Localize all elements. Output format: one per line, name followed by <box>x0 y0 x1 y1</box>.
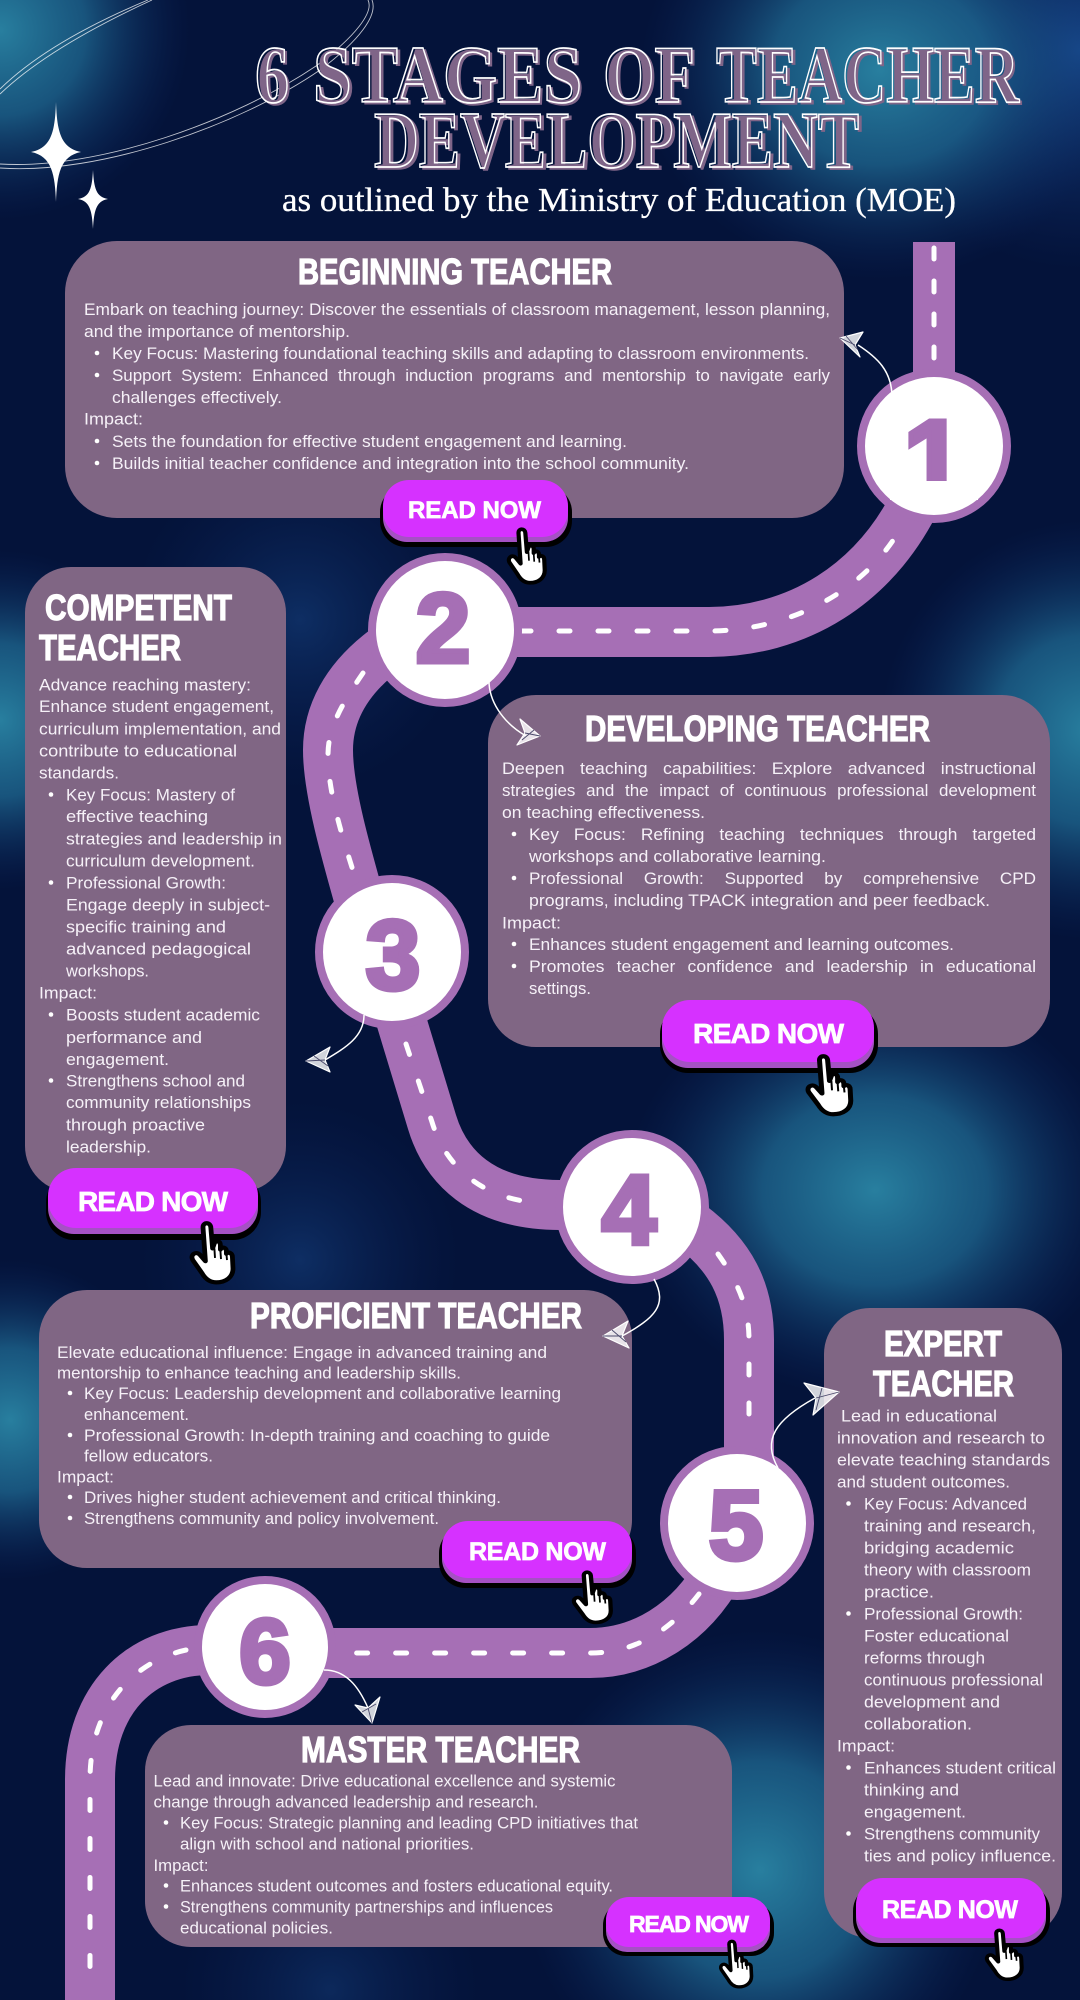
body text: ties and policy influence. <box>864 1846 1056 1866</box>
arrow: stage 2 to developing panel <box>489 678 540 745</box>
button: proficient read now: READ NOW <box>469 1538 606 1566</box>
button: competent read now <box>46 1168 261 1240</box>
icon: hand cursor expert <box>987 1930 1022 1979</box>
stage marker 4 <box>559 1134 705 1280</box>
button: competent read now: READ NOW <box>78 1186 229 1217</box>
body text: Boosts student academic <box>66 1006 260 1024</box>
body text: curriculum development. <box>66 852 255 870</box>
body text: leadership. <box>66 1138 151 1156</box>
stage marker 4: 4 <box>602 1155 656 1265</box>
body text: Impact: <box>84 410 143 428</box>
body text: reforms through <box>864 1648 985 1668</box>
title: DEVELOPMENT <box>374 97 859 185</box>
body text <box>84 300 830 473</box>
stage marker 2 <box>372 557 518 703</box>
body text: Strengthens community partnerships and influences <box>180 1898 553 1916</box>
icon: hand cursor beginning <box>509 529 545 583</box>
body text: and student outcomes. <box>837 1472 1010 1492</box>
body text: Support System: Enhanced through induction programs and mentorship to navigate early <box>112 366 830 385</box>
body text: Elevate educational influence: Engage in advanced training and <box>57 1343 547 1362</box>
body text: on teaching effectiveness. <box>502 803 705 822</box>
icon: hand cursor master <box>721 1941 752 1987</box>
body text: Advance reaching mastery: <box>39 676 251 694</box>
body text: Key Focus: Mastering foundational teaching skills and adapting to classroom environments. <box>112 344 809 363</box>
stage marker 5 <box>664 1450 810 1596</box>
panel: developing teacher <box>488 695 1050 1047</box>
body text: innovation and research to <box>837 1428 1045 1448</box>
body text: Enhances student critical <box>864 1758 1056 1778</box>
arrow: stage 5 to expert panel <box>771 1383 839 1468</box>
body text: enhancement. <box>84 1405 189 1424</box>
heading <box>873 1323 1014 1404</box>
panel: beginning teacher <box>65 241 844 518</box>
heading: BEGINNING TEACHER <box>298 251 612 292</box>
body text: Professional Growth: <box>864 1604 1023 1624</box>
button: beginning read now: READ NOW <box>408 497 541 524</box>
title: OF <box>603 29 695 120</box>
body text: strategies and leadership in <box>66 830 282 848</box>
body text: standards. <box>39 764 119 782</box>
heading: DEVELOPING TEACHER <box>585 708 930 749</box>
body text: Impact: <box>57 1468 114 1486</box>
body text: Strengthens community and policy involvement. <box>84 1509 439 1528</box>
body text: Impact: <box>154 1856 208 1875</box>
subtitle: as outlined by the Ministry of Education (MOE) <box>282 182 956 219</box>
icon: small sparkle <box>78 170 108 229</box>
body text: Professional Growth: Supported by comprehensive CPD <box>529 869 1036 888</box>
title: STAGES <box>313 29 582 120</box>
body text <box>502 759 1036 998</box>
stage marker 3 <box>319 879 465 1025</box>
stage marker 6 <box>198 1580 332 1714</box>
body text: Impact: <box>39 984 97 1002</box>
body text: bridging academic <box>864 1538 1015 1558</box>
panel: expert teacher <box>824 1308 1062 1938</box>
body text: workshops and collaborative learning. <box>528 847 826 866</box>
title: 6 <box>258 31 291 122</box>
panel: proficient teacher <box>39 1290 632 1568</box>
body text: Embark on teaching journey: Discover the essentials of classroom management, lesson planning, <box>84 300 830 319</box>
body text: Foster educational <box>864 1626 1009 1646</box>
title: STAGES <box>316 31 584 122</box>
button: master read now <box>603 1897 774 1956</box>
body text: Deepen teaching capabilities: Explore advanced instructional <box>502 759 1036 778</box>
button: developing read now: READ NOW <box>693 1018 845 1049</box>
body text: Lead in educational <box>841 1406 997 1426</box>
icon: hand cursor developing <box>808 1056 851 1114</box>
body text: elevate teaching standards <box>837 1450 1050 1470</box>
body text: Strengthens community <box>864 1824 1040 1844</box>
body text: Key Focus: Advanced <box>864 1494 1027 1514</box>
heading: MASTER TEACHER <box>301 1729 580 1770</box>
body text: collaboration. <box>864 1714 972 1734</box>
body text: fellow educators. <box>84 1446 213 1466</box>
body text: specific training and <box>66 918 226 936</box>
body text: Key Focus: Refining teaching techniques through targeted <box>529 825 1036 844</box>
arrow: stage 6 to master panel <box>324 1670 380 1723</box>
body text: mentorship to enhance teaching and leadership skills. <box>57 1364 461 1382</box>
body text: contribute to educational <box>39 742 237 760</box>
body text: Lead and innovate: Drive educational excellence and systemic <box>154 1772 616 1790</box>
body text: programs, including TPACK integration and peer feedback. <box>529 891 990 910</box>
body text: change through advanced leadership and research. <box>154 1792 538 1812</box>
body text: Professional Growth: <box>66 874 226 892</box>
body text: Builds initial teacher confidence and integration into the school community. <box>112 454 689 473</box>
icon: large sparkle <box>31 102 81 202</box>
body text: effective teaching <box>66 807 208 826</box>
title: DEVELOPMENT <box>377 99 862 187</box>
body text: engagement. <box>864 1802 966 1822</box>
body text: through proactive <box>66 1116 205 1134</box>
body text: engagement. <box>66 1050 169 1069</box>
body text: strategies and the impact of continuous professional development <box>502 781 1036 800</box>
button: developing read now <box>660 1000 878 1073</box>
body text: Impact: <box>502 914 561 932</box>
stage marker 2: 2 <box>416 573 470 683</box>
body text: settings. <box>529 979 591 998</box>
body text: align with school and national priorities. <box>180 1834 474 1854</box>
body text: development and <box>864 1692 1000 1712</box>
button: proficient read now <box>439 1521 636 1588</box>
stage marker 1: 1 <box>903 398 965 521</box>
body text: Promotes teacher confidence and leadership in educational <box>529 957 1036 976</box>
heading: PROFICIENT TEACHER <box>250 1295 582 1336</box>
body text: Strengthens school and <box>66 1072 245 1090</box>
button: master read now: READ NOW <box>629 1911 749 1937</box>
body text: and the importance of mentorship. <box>84 322 350 341</box>
stage marker 5: 5 <box>709 1470 763 1580</box>
road <box>90 242 934 2000</box>
body text: Enhances student outcomes and fosters educational equity. <box>180 1876 613 1896</box>
heading: COMPETENT <box>45 587 232 628</box>
body text: workshops. <box>65 962 149 980</box>
button: expert read now <box>853 1878 1050 1947</box>
icon: hand cursor competent <box>192 1223 233 1282</box>
title: 6 <box>255 29 289 120</box>
icon: hand cursor proficient <box>574 1572 611 1622</box>
body text: Sets the foundation for effective student engagement and learning. <box>112 432 627 451</box>
body text: challenges effectively. <box>112 388 282 407</box>
stage marker 6: 6 <box>239 1601 291 1703</box>
body text <box>57 1343 561 1528</box>
button: beginning read now <box>380 480 572 547</box>
body text: Engage deeply in subject- <box>66 896 270 914</box>
arrow: stage 3 to competent panel <box>306 1015 364 1072</box>
body text: performance and <box>66 1028 202 1047</box>
body text: thinking and <box>864 1780 959 1800</box>
body text: educational policies. <box>180 1918 333 1938</box>
decorative orbit lines <box>0 0 373 169</box>
stage marker 1 <box>861 373 1007 521</box>
body text <box>154 1772 638 1938</box>
body text: Professional Growth: In-depth training and coaching to guide <box>84 1426 550 1445</box>
title <box>255 29 1022 187</box>
arrow: stage 4 to proficient panel <box>603 1279 660 1348</box>
body text: curriculum implementation, and <box>39 720 281 738</box>
arrow: stage 1 to beginning panel <box>840 332 892 395</box>
heading: TEACHER <box>873 1363 1014 1404</box>
body text: Key Focus: Leadership development and collaborative learning <box>84 1384 561 1403</box>
heading: TEACHER <box>39 627 181 668</box>
body text <box>837 1406 1056 1866</box>
body text: practice. <box>864 1582 934 1602</box>
body text: Key Focus: Strategic planning and leading CPD initiatives that <box>180 1814 638 1832</box>
body text: community relationships <box>66 1093 251 1112</box>
body text: continuous professional <box>864 1670 1043 1690</box>
body text: Drives higher student achievement and critical thinking. <box>84 1488 501 1507</box>
body text: advanced pedagogical <box>66 940 251 958</box>
panel: master teacher <box>145 1725 732 1947</box>
title: OF <box>606 31 697 122</box>
stage marker 3: 3 <box>366 900 420 1010</box>
body text <box>39 676 282 1156</box>
body text: theory with classroom <box>864 1560 1031 1580</box>
body text: Enhance student engagement, <box>39 697 274 716</box>
button: expert read now: READ NOW <box>882 1896 1018 1924</box>
panel: competent teacher <box>25 567 286 1192</box>
body text: Impact: <box>837 1736 895 1756</box>
heading: EXPERT <box>884 1323 1002 1364</box>
body text: training and research, <box>864 1516 1036 1536</box>
body text: Enhances student engagement and learning outcomes. <box>529 935 954 954</box>
heading <box>39 587 232 668</box>
body text: Key Focus: Mastery of <box>66 786 235 804</box>
